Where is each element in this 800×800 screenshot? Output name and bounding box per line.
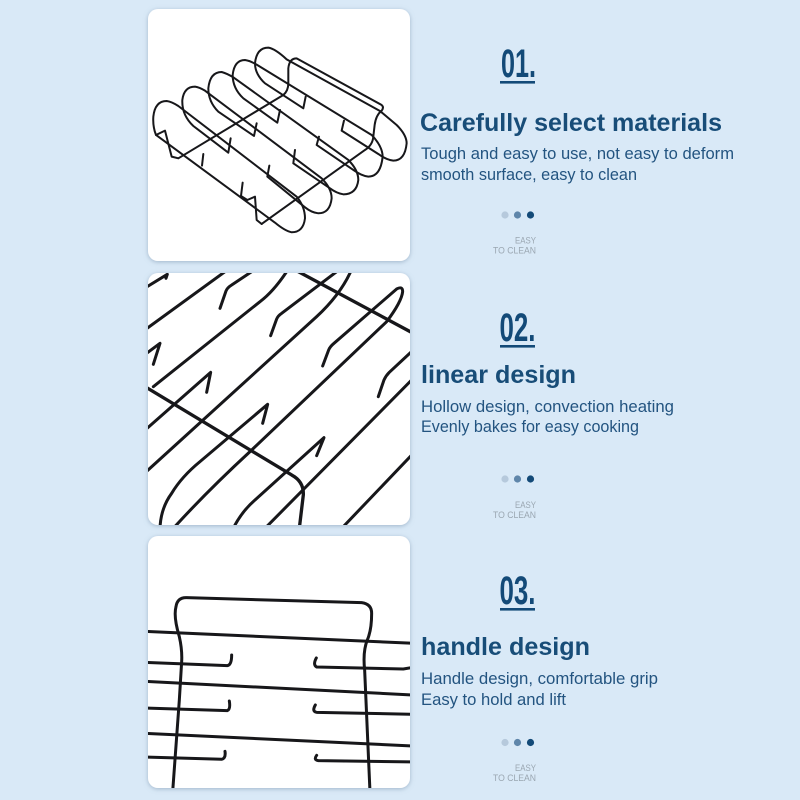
icon: full wire rack illustration	[153, 48, 407, 232]
heading: linear design	[421, 361, 576, 389]
caption	[493, 763, 537, 784]
icon: angled wire close-up	[143, 272, 413, 528]
description: Handle design, comfortable grip	[421, 670, 658, 688]
description	[421, 398, 674, 436]
description: Tough and easy to use, not easy to deform	[421, 145, 734, 163]
text block: section 03	[421, 569, 658, 784]
number 03	[500, 569, 536, 613]
caption	[493, 500, 537, 521]
panel: photo of wire rack	[148, 9, 410, 261]
number 03: 03.	[500, 569, 536, 613]
panel: close-up of linear wires	[143, 272, 413, 528]
number 01: 01.	[501, 42, 536, 86]
number 02	[500, 306, 536, 350]
rating dots	[501, 475, 534, 483]
caption: TO CLEAN	[493, 246, 536, 256]
description	[421, 670, 658, 709]
panel: close-up of handle	[143, 536, 413, 792]
caption: EASY	[515, 236, 537, 246]
heading: handle design	[421, 633, 590, 661]
description: Evenly bakes for easy cooking	[421, 418, 639, 436]
rating dots	[501, 739, 534, 746]
description: smooth surface, easy to clean	[421, 166, 637, 184]
caption: EASY	[515, 763, 537, 774]
text block: section 01	[420, 42, 734, 256]
heading: Carefully select materials	[420, 109, 722, 137]
caption	[493, 236, 537, 256]
description: Easy to hold and lift	[421, 691, 566, 709]
caption: TO CLEAN	[493, 510, 536, 521]
number 02: 02.	[500, 306, 536, 350]
number 01	[500, 42, 536, 86]
description: Hollow design, convection heating	[421, 398, 674, 416]
description	[421, 145, 734, 184]
caption: EASY	[515, 500, 537, 511]
icon: handle and wires front view	[143, 598, 413, 792]
rating dots	[501, 211, 534, 219]
text block: section 02	[421, 306, 674, 521]
caption: TO CLEAN	[493, 773, 536, 784]
